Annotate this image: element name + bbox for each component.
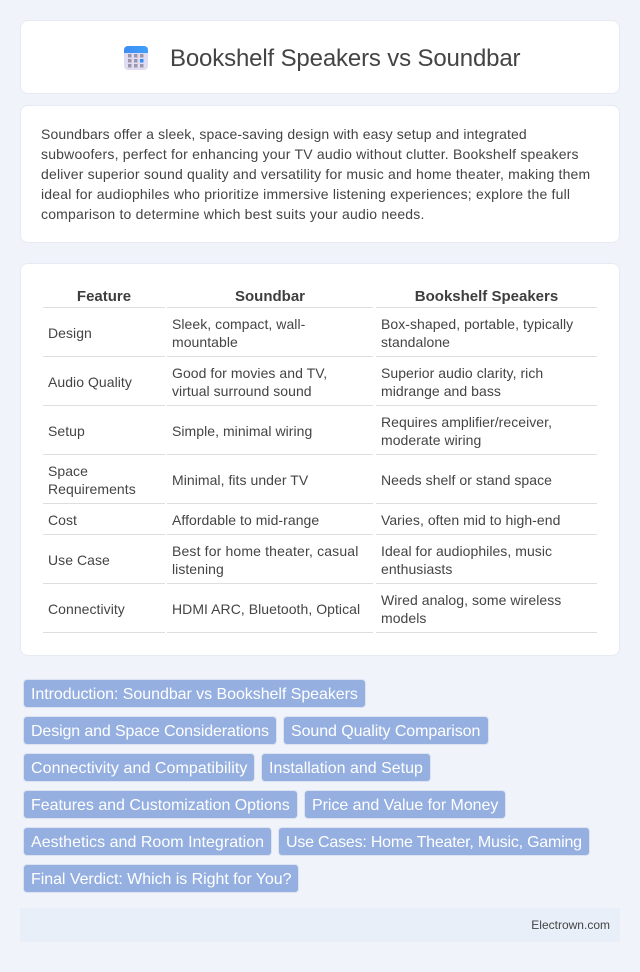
row: cost: Affordable to mid-range: [172, 512, 319, 528]
row: cost: [48, 512, 560, 528]
comparison table card: [20, 263, 620, 656]
row: setup: [48, 414, 552, 448]
footer credit: Electrown.com: [531, 918, 610, 932]
row: space requirements: Needs shelf or stand space: [381, 472, 552, 488]
table header: Feature: [77, 288, 131, 305]
row: use case: Use Case: [48, 552, 110, 568]
row: cost: Varies, often mid to high-end: [381, 512, 560, 528]
row: setup: moderate wiring: [381, 432, 481, 448]
intro paragraph: [41, 126, 590, 222]
row: setup: Simple, minimal wiring: [172, 423, 312, 439]
tag: Introduction: Soundbar vs Bookshelf Speakers: [31, 686, 358, 703]
row: use case: Ideal for audiophiles, music: [381, 543, 552, 559]
row: connectivity: Wired analog, some wireless: [381, 592, 561, 608]
row: cost: Cost: [48, 512, 77, 528]
tag: Sound Quality Comparison: [291, 723, 480, 740]
row: audio quality: Good for movies and TV,: [172, 365, 327, 381]
table header: [77, 288, 558, 305]
tag: Installation and Setup: [269, 760, 423, 777]
row: setup: Setup: [48, 423, 85, 439]
tag: [23, 864, 299, 893]
header card: [20, 20, 620, 94]
tag: [23, 827, 272, 856]
tag: [23, 679, 366, 708]
row: connectivity: HDMI ARC, Bluetooth, Optical: [172, 601, 360, 617]
row: design: Box-shaped, portable, typically: [381, 316, 573, 332]
tag: [23, 790, 298, 819]
row: audio quality: midrange and bass: [381, 383, 501, 399]
tag: Design and Space Considerations: [31, 723, 269, 740]
row: connectivity: [48, 592, 561, 626]
row: design: mountable: [172, 334, 238, 350]
title: Bookshelf Speakers vs Soundbar: [170, 45, 520, 72]
icon: calendar grid: [124, 46, 148, 70]
topic tags: [23, 679, 590, 893]
comparison table: [43, 288, 597, 633]
intro paragraph: ideal for audiophiles who prioritize immersive listening experiences; explore the full: [41, 186, 570, 202]
row: audio quality: Audio Quality: [48, 374, 132, 390]
row: use case: listening: [172, 561, 224, 577]
row: use case: [48, 543, 552, 577]
intro paragraph: subwoofers, perfect for enhancing your TV audio without clutter. Bookshelf speakers: [41, 146, 579, 162]
row: audio quality: Superior audio clarity, rich: [381, 365, 543, 381]
row: audio quality: virtual surround sound: [172, 383, 312, 399]
table header: Soundbar: [235, 288, 305, 305]
tag: Connectivity and Compatibility: [31, 760, 247, 777]
row: design: Design: [48, 325, 92, 341]
row: use case: Best for home theater, casual: [172, 543, 358, 559]
intro paragraph: Soundbars offer a sleek, space-saving design with easy setup and integrated: [41, 126, 527, 142]
tag: [261, 753, 431, 782]
row: space requirements: Minimal, fits under TV: [172, 472, 308, 488]
tag: Price and Value for Money: [312, 797, 498, 814]
tag: Features and Customization Options: [31, 797, 290, 814]
intro paragraph: comparison to determine which best suits your audio needs.: [41, 206, 425, 222]
tag: Final Verdict: Which is Right for You?: [31, 871, 291, 888]
tag: [278, 827, 590, 856]
tag: [304, 790, 506, 819]
row: design: [48, 316, 574, 350]
tag: Use Cases: Home Theater, Music, Gaming: [286, 834, 582, 851]
row: space requirements: Space: [48, 463, 88, 479]
row: use case: enthusiasts: [381, 561, 452, 577]
footer: [20, 908, 620, 942]
row: space requirements: Requirements: [48, 481, 136, 497]
row: connectivity: models: [381, 610, 426, 626]
row: design: standalone: [381, 334, 450, 350]
tag: [23, 716, 277, 745]
row: setup: Requires amplifier/receiver,: [381, 414, 552, 430]
intro paragraph: deliver superior sound quality and versatility for music and home theater, making them: [41, 166, 590, 182]
row: audio quality: [48, 365, 543, 399]
intro card: [20, 105, 620, 243]
tag: [283, 716, 489, 745]
row: design: Sleek, compact, wall-: [172, 316, 305, 332]
row: connectivity: Connectivity: [48, 601, 125, 617]
table header: Bookshelf Speakers: [415, 288, 558, 305]
tag: [23, 753, 255, 782]
row: space requirements: [48, 463, 552, 497]
tag: Aesthetics and Room Integration: [31, 834, 264, 851]
